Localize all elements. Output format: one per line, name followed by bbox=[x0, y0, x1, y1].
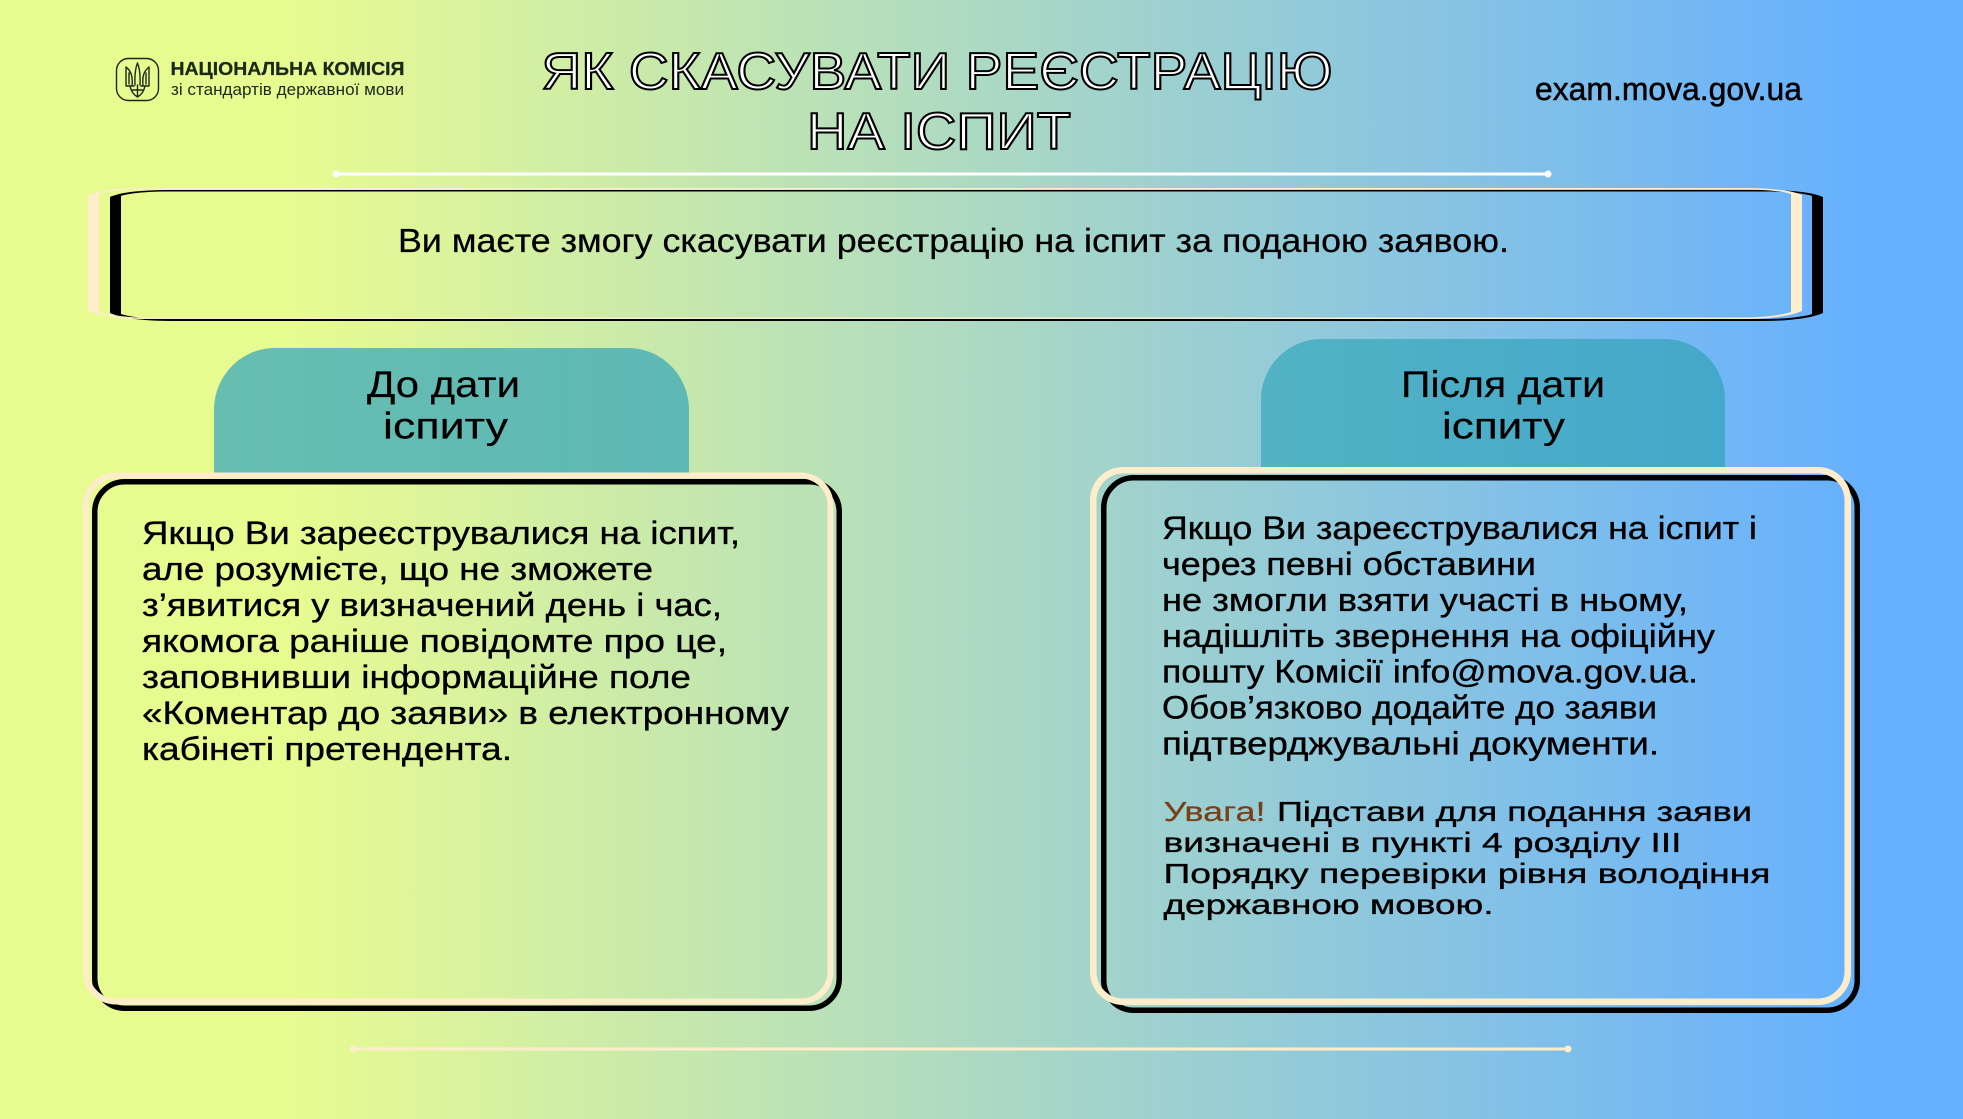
card frame: cream bbox=[86, 476, 830, 1002]
tab: after exam date: Після дати bbox=[1401, 364, 1605, 405]
title bbox=[542, 43, 1332, 161]
tab: after exam date: іспиту bbox=[1442, 406, 1566, 446]
banner text: Ви маєте змогу скасувати реєстрацію на іспит за поданою заявою. bbox=[398, 222, 1509, 259]
text block: after exam date bbox=[1162, 510, 1757, 762]
text block: before exam date: кабінеті претендента. bbox=[142, 731, 512, 767]
callout: attention note: державною мовою. bbox=[1164, 889, 1494, 920]
tab: after exam date bbox=[1261, 339, 1725, 468]
card frame: black bbox=[1104, 478, 1857, 1010]
logo: national commission bbox=[116, 58, 404, 100]
card frame: cream bbox=[1093, 470, 1848, 1002]
text block: after exam date: не змогли взяти участі в ньому, bbox=[1162, 582, 1688, 618]
text block: before exam date: Якщо Ви зареєструвалися на іспит, bbox=[142, 515, 740, 551]
text block: before exam date: «Коментар до заяви» в електронному bbox=[142, 695, 789, 731]
tab: before exam date: іспиту bbox=[383, 406, 509, 446]
text block: after exam date: через певні обставини bbox=[1162, 546, 1536, 582]
panel: after exam date bbox=[1093, 339, 1857, 1010]
logo text: line 2: зі стандартів державної мови bbox=[171, 81, 404, 99]
panel: before exam date bbox=[86, 348, 839, 1008]
callout: attention note bbox=[1164, 796, 1770, 920]
icon: trident bbox=[116, 58, 158, 100]
callout: attention note: Підстави для подання заяви bbox=[1277, 796, 1752, 827]
website url: exam.mova.gov.ua bbox=[1535, 71, 1802, 107]
card frame: black bbox=[95, 482, 839, 1008]
logo text: line 1: НАЦІОНАЛЬНА КОМІСІЯ bbox=[170, 59, 404, 79]
text block: after exam date: пошту Комісії info@mova.gov.ua. bbox=[1162, 654, 1698, 690]
callout: attention note: визначені в пункті 4 розділу ІІІ bbox=[1164, 827, 1682, 858]
text block: before exam date: якомога раніше повідомте про це, bbox=[142, 623, 727, 659]
tab: before exam date: До дати bbox=[367, 364, 520, 405]
text block: before exam date: заповнивши інформаційне поле bbox=[142, 659, 691, 695]
callout: attention note: Порядку перевірки рівня володіння bbox=[1164, 858, 1770, 889]
title: НА ІСПИТ bbox=[807, 103, 1071, 161]
text block: after exam date: надішліть звернення на офіційну bbox=[1162, 618, 1715, 654]
title: ЯК СКАСУВАТИ РЕЄСТРАЦІЮ bbox=[542, 43, 1332, 101]
tab: before exam date bbox=[214, 348, 689, 473]
callout: attention note: Увага! bbox=[1164, 796, 1266, 827]
text block: after exam date: Обов’язково додайте до заяви bbox=[1162, 690, 1657, 726]
bottom divider line bbox=[350, 1046, 1572, 1052]
panel: intro banner bbox=[88, 188, 1823, 321]
text block: after exam date: підтверджувальні документи. bbox=[1162, 726, 1659, 762]
text block: after exam date: Якщо Ви зареєструвалися на іспит і bbox=[1162, 510, 1757, 546]
text block: before exam date: але розумієте, що не зможете bbox=[142, 551, 653, 587]
text block: before exam date bbox=[142, 515, 789, 767]
text block: before exam date: з’явитися у визначений день і час, bbox=[142, 587, 722, 623]
top divider line bbox=[332, 170, 1552, 178]
